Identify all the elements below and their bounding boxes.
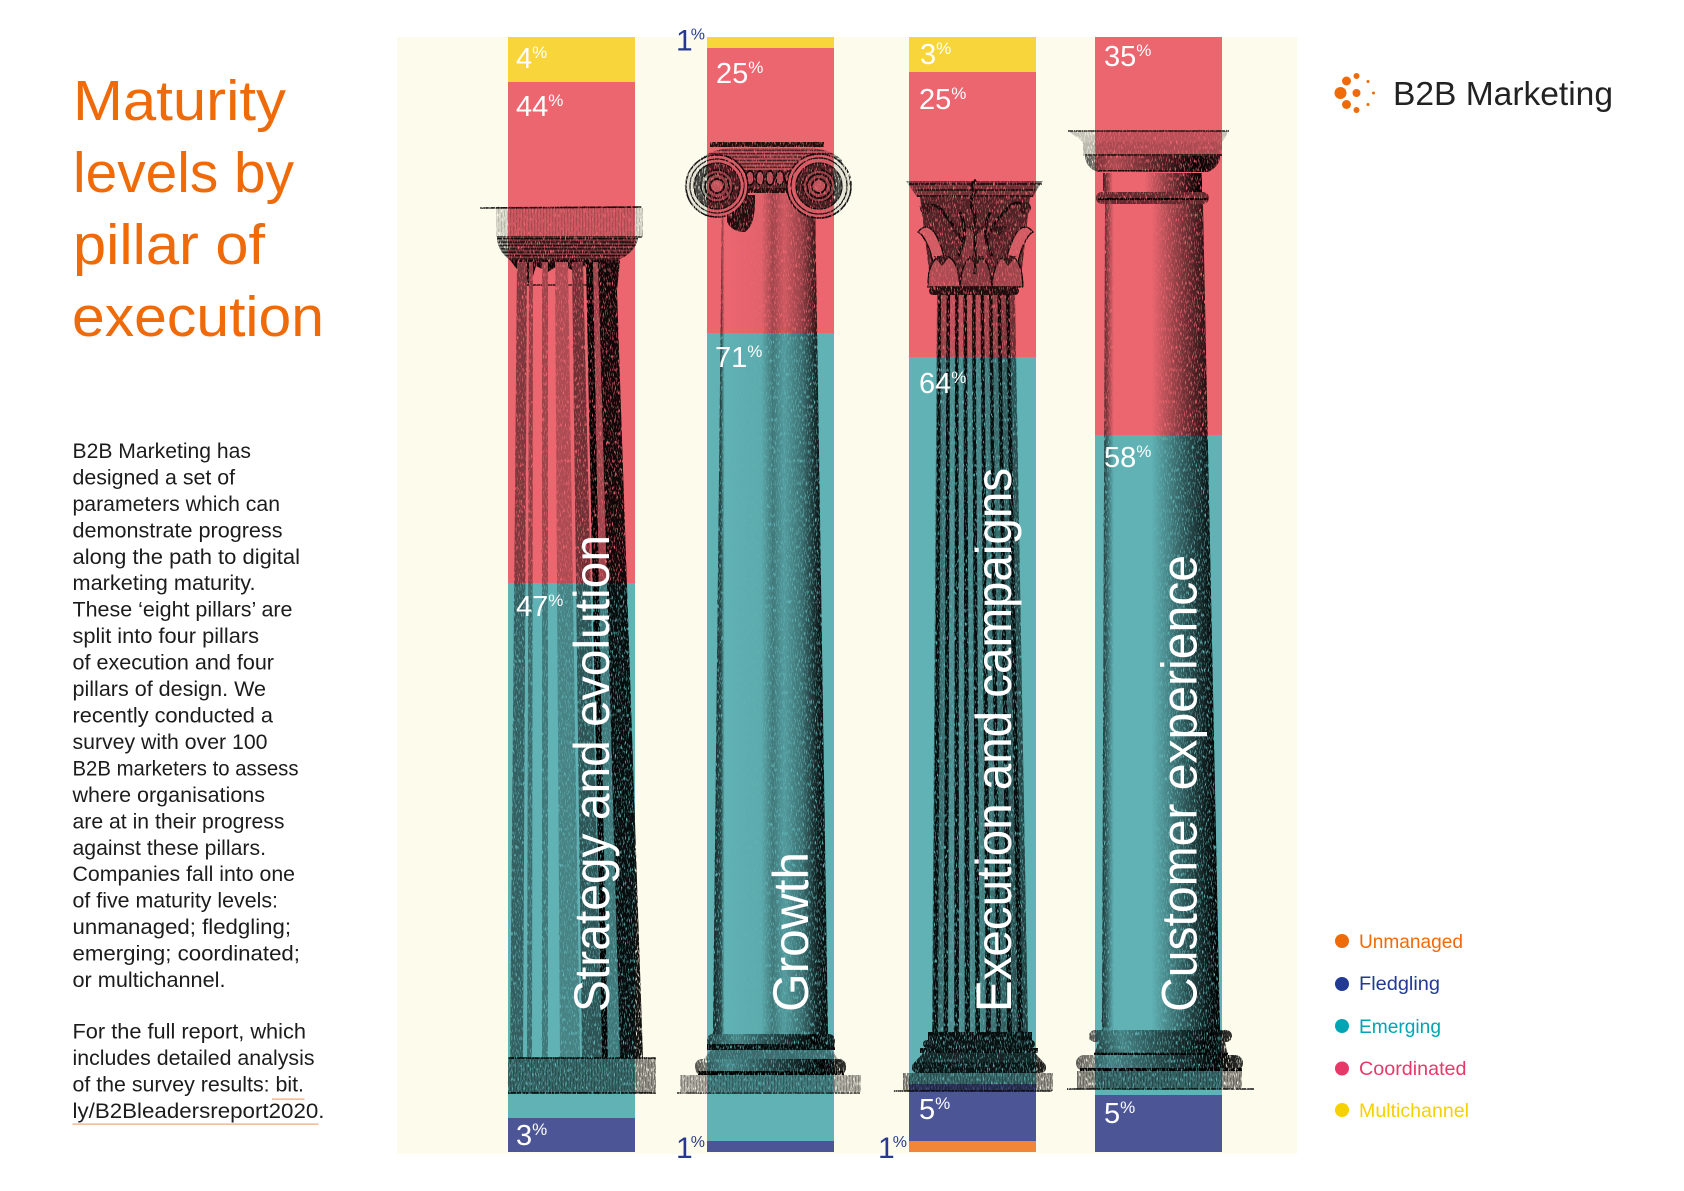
intro text block: Companies fall into one — [72, 863, 295, 886]
intro text block: or multichannel. — [72, 969, 226, 992]
percentages: strategy and evolution: 44 — [516, 91, 548, 123]
intro text block: These ‘eight pillars’ are — [72, 598, 292, 622]
intro text block: are at in their progress — [72, 810, 284, 834]
logo: B2B Marketing: B2B Marketing — [1393, 75, 1613, 112]
illustration: Doric column — [480, 207, 656, 1093]
percentages: growth: % — [747, 342, 762, 361]
report link text block: of the survey results: bit. — [72, 1074, 304, 1096]
cream panel — [397, 37, 1297, 1154]
percentages: customer experience — [1104, 41, 1151, 1130]
intro text block: B2B marketers to assess — [72, 758, 298, 780]
column label: customer experience: Customer experience — [1152, 555, 1208, 1012]
percentages: growth: 71 — [715, 342, 747, 374]
intro text block: of five maturity levels: — [72, 890, 278, 912]
column label: growth: Growth — [763, 852, 819, 1012]
percentages: strategy and evolution: 47 — [516, 591, 548, 623]
illustration: Ionic column — [677, 142, 861, 1093]
percentages: execution and campaigns: % — [951, 84, 966, 103]
percentages: customer experience: 35 — [1104, 41, 1136, 73]
intro text block — [71, 440, 300, 992]
intro text block: recently conducted a — [72, 704, 273, 728]
report link text block: For the full report, which — [72, 1020, 306, 1044]
bar: customer experience — [1095, 37, 1222, 1152]
intro text block: pillars of design. We — [72, 678, 266, 701]
percentages: execution and campaigns: % — [936, 39, 951, 58]
icon: logo dots — [1334, 73, 1375, 113]
percentages: strategy and evolution: % — [532, 43, 547, 62]
bar: execution and campaigns — [909, 37, 1036, 1152]
percentages: execution and campaigns: 64 — [919, 368, 951, 400]
legend item: coordinated: Coordinated — [1359, 1058, 1466, 1080]
legend — [1335, 931, 1469, 1122]
title: Maturity — [73, 69, 287, 133]
percentages: strategy and evolution: 4 — [516, 43, 532, 75]
column label: strategy and evolution: Strategy and evolution — [564, 535, 620, 1012]
outside percentage labels — [676, 24, 907, 1165]
intro text block: where organisations — [71, 784, 265, 807]
percentages: customer experience: 58 — [1104, 442, 1136, 474]
intro text block: along the path to digital — [72, 546, 300, 569]
percentages: growth: 25 — [716, 58, 748, 90]
percentages: strategy and evolution: % — [532, 1120, 547, 1139]
intro text block: of execution and four — [72, 652, 274, 674]
stacked bars — [508, 37, 1222, 1152]
outside percentage labels: 1 — [676, 24, 693, 58]
percentages: execution and campaigns: 25 — [919, 84, 951, 116]
illustration: Corinthian column — [894, 180, 1053, 1091]
intro text block: designed a set of — [72, 466, 235, 490]
percentages: execution and campaigns: % — [951, 368, 966, 387]
percentages: customer experience: 5 — [1104, 1098, 1120, 1130]
intro text block: emerging; coordinated; — [72, 942, 300, 966]
intro text block: demonstrate progress — [72, 520, 282, 542]
intro text block: split into four pillars — [72, 625, 259, 648]
percentages: execution and campaigns: 3 — [920, 39, 936, 71]
percentages: strategy and evolution: % — [548, 591, 563, 610]
report link text block: ly/B2Bleadersreport2020. — [72, 1100, 324, 1123]
intro text block: survey with over 100 — [72, 731, 268, 754]
title — [72, 69, 324, 349]
percentages: growth: % — [748, 58, 763, 77]
intro text block: marketing maturity. — [72, 572, 256, 595]
intro text block: B2B Marketing has — [72, 440, 251, 463]
percentages: customer experience: % — [1136, 41, 1151, 60]
title: execution — [72, 285, 324, 349]
title: pillar of — [73, 213, 265, 277]
intro text block: parameters which can — [72, 493, 280, 516]
outside percentage labels: % — [893, 1134, 907, 1151]
legend item: unmanaged: Unmanaged — [1359, 931, 1463, 953]
percentages: customer experience: % — [1120, 1098, 1135, 1117]
report link text block: includes detailed analysis — [72, 1047, 314, 1070]
column label: execution and campaigns: Execution and campaigns — [966, 468, 1022, 1012]
bar: growth — [707, 37, 834, 1152]
intro text block: unmanaged; fledgling; — [72, 916, 291, 939]
intro text block: against these pillars. — [72, 837, 266, 860]
legend item: multichannel: Multichannel — [1359, 1100, 1469, 1122]
percentages: customer experience: % — [1136, 442, 1151, 461]
bar: strategy and evolution — [508, 37, 635, 1152]
report link text block — [72, 1020, 324, 1125]
percentages: growth — [715, 58, 763, 374]
percentages: strategy and evolution — [516, 43, 563, 1152]
outside percentage labels: 1 — [878, 1132, 895, 1165]
outside percentage labels: % — [691, 1134, 705, 1151]
percentages: strategy and evolution: % — [548, 91, 563, 110]
legend item: emerging: Emerging — [1359, 1016, 1441, 1038]
percentages: strategy and evolution: 3 — [516, 1120, 532, 1152]
outside percentage labels: 1 — [676, 1132, 693, 1165]
percentages: execution and campaigns: 5 — [919, 1094, 935, 1126]
legend item: fledgling: Fledgling — [1359, 973, 1440, 995]
title: levels by — [73, 141, 294, 205]
percentages: execution and campaigns — [919, 39, 966, 1126]
illustration: Tuscan column — [1067, 131, 1254, 1089]
outside percentage labels: % — [691, 26, 705, 44]
percentages: execution and campaigns: % — [935, 1094, 950, 1113]
